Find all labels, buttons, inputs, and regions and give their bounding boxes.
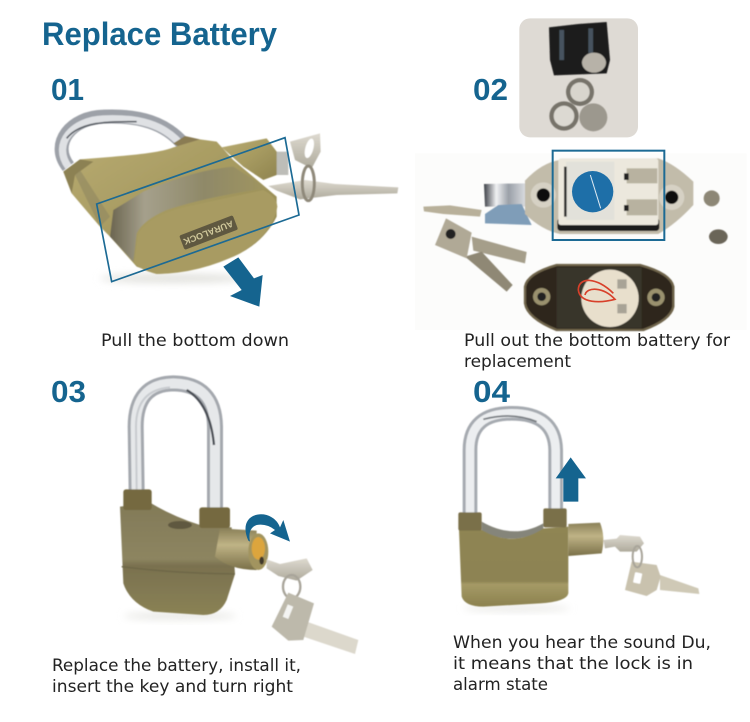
caption 04: alarm state [453, 675, 548, 694]
caption 03: insert the key and turn right [52, 677, 294, 696]
photo: padlock lying with bottom pulled [62, 116, 398, 307]
step number 02: 02 [473, 72, 508, 107]
red wires [578, 280, 615, 302]
photo: padlock with key turned right [120, 383, 358, 654]
arrow: up [556, 457, 586, 502]
caption 03 [52, 656, 301, 696]
panel: step 03 [51, 374, 358, 696]
panel: step 04 [453, 374, 711, 694]
panel: step 01 [51, 72, 398, 350]
inset: batteries [519, 18, 638, 137]
caption 02: replacement [464, 352, 572, 371]
photo: opened battery compartment [415, 18, 747, 330]
arrow: turn right [245, 514, 290, 542]
caption 02: Pull out the bottom battery for [464, 331, 730, 350]
step number 01: 01 [51, 72, 84, 107]
brand plate: AURALOCK [181, 219, 235, 247]
battery disc [572, 171, 613, 212]
photo: padlock with shackle raised [458, 413, 699, 611]
caption 04: it means that the lock is in [453, 654, 693, 673]
highlight box [553, 151, 664, 240]
step number 04: 04 [473, 374, 511, 409]
brand plate [179, 215, 238, 250]
caption 03: Replace the battery, install it, [52, 656, 301, 675]
caption 01: Pull the bottom down [101, 331, 289, 350]
panel: step 02 [415, 18, 747, 371]
caption 04: When you hear the sound Du, [453, 633, 711, 652]
highlight box [97, 138, 299, 282]
arrow: down [223, 257, 263, 307]
step number 03: 03 [51, 374, 86, 409]
title: Replace Battery [42, 16, 277, 52]
caption 02 [464, 331, 730, 371]
caption 04 [453, 633, 711, 694]
